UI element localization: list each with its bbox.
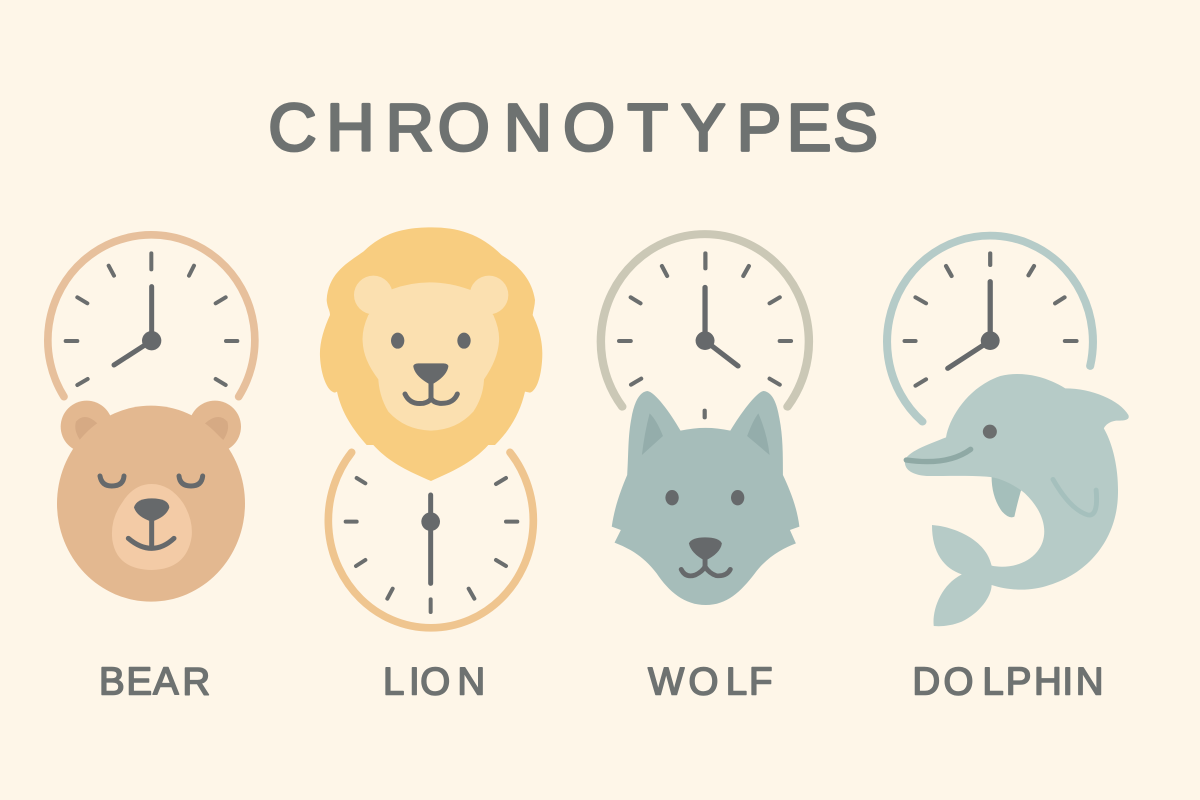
panel: bear — [48, 235, 255, 602]
icon: lion face — [320, 227, 542, 481]
label: wolf: WOLF — [648, 660, 773, 704]
panel: wolf — [601, 234, 809, 605]
clock: wolf — [601, 234, 809, 417]
label: lion: LION — [383, 660, 485, 704]
icon: bear face — [57, 401, 245, 602]
clock: lion — [328, 452, 533, 628]
clock: bear — [48, 235, 255, 397]
panel: lion — [320, 227, 542, 628]
clock: dolphin — [887, 236, 1093, 422]
label: bear: BEAR — [99, 660, 210, 704]
label: dolphin: DOLPHIN — [912, 660, 1104, 704]
icon: wolf face — [612, 391, 799, 605]
icon: dolphin — [905, 374, 1129, 626]
panel: dolphin — [887, 236, 1129, 626]
title: CHRONOTYPES — [268, 90, 878, 165]
